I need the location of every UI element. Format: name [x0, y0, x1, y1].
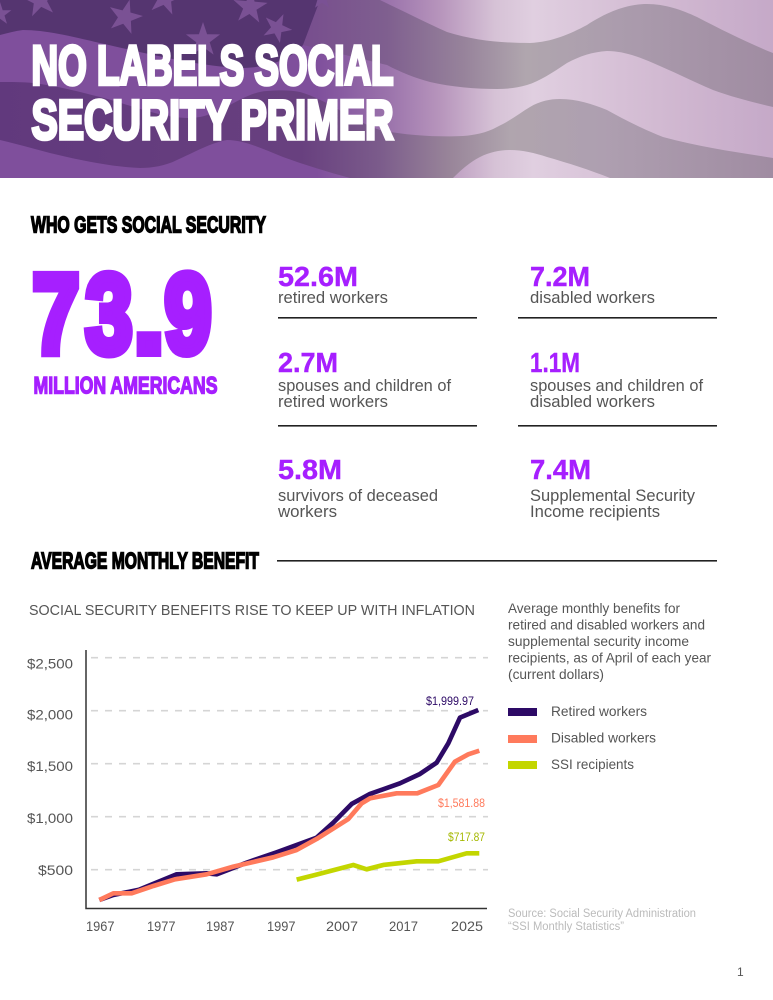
chart description: supplemental security income [508, 633, 689, 649]
x-axis labels: 2017 [389, 919, 418, 934]
panel: flag banner header [0, 0, 773, 178]
stat: spouses and children of retired workers: 2.7M [278, 347, 338, 378]
legend [508, 703, 656, 772]
big stat: 73.9 million Americans: . [134, 252, 164, 376]
value label: retired: $1,999.97 [426, 696, 474, 708]
value label: disabled: $1,581.88 [438, 798, 485, 810]
line: disabled workers [99, 751, 479, 900]
y-axis labels [27, 656, 73, 878]
x-axis labels [86, 919, 483, 934]
big stat: 73.9 million Americans: 3 [86, 252, 132, 376]
stat: survivors of deceased workers [277, 454, 438, 521]
y-axis labels: $2,000 [27, 706, 73, 722]
big stat: 73.9 million Americans: 9 [164, 252, 212, 376]
stat: spouses and children of disabled workers [518, 347, 717, 427]
flag stripe: upper dark band [303, 0, 773, 107]
x-axis labels: 1967 [86, 919, 114, 934]
stat: supplemental security income recipients: 7.4M [530, 454, 591, 485]
heading: who gets social security: WHO GETS SOCIAL SECURITY [31, 212, 266, 238]
y-axis labels: $1,000 [27, 810, 73, 826]
x-axis labels: 1997 [267, 919, 296, 934]
stat: disabled workers [518, 261, 717, 319]
title [32, 34, 394, 151]
title: NO LABELS SOCIAL [32, 34, 394, 96]
chart description [508, 600, 711, 682]
source note: Source: Social Security Administration [508, 908, 696, 920]
line chart: average monthly benefits [27, 650, 488, 934]
source note [508, 908, 696, 933]
stat: retired workers [278, 261, 477, 319]
y-axis labels: $2,500 [27, 656, 73, 672]
legend: Retired workers [551, 703, 647, 719]
source note: “SSI Monthly Statistics” [508, 921, 624, 933]
x-axis labels: 1977 [147, 919, 176, 934]
y-axis labels: $1,500 [27, 758, 73, 774]
big stat: 73.9 million Americans [32, 252, 218, 400]
stat: supplemental security income recipients: Supplemental Security [530, 486, 695, 505]
chart description: retired and disabled workers and [508, 616, 705, 632]
stat: survivors of deceased workers: survivors of deceased [278, 486, 438, 505]
chart description: Average monthly benefits for [508, 600, 680, 616]
x-axis labels: 2025 [451, 919, 483, 934]
stat: disabled workers: disabled workers [530, 288, 655, 307]
flag stripe: lower dark band [0, 82, 773, 178]
stat: survivors of deceased workers: workers [277, 502, 337, 521]
stat: spouses and children of retired workers: spouses and children of [278, 376, 451, 395]
chart title: SOCIAL SECURITY BENEFITS RISE TO KEEP UP WITH INFLATION [29, 603, 475, 619]
legend: Disabled workers [551, 730, 656, 746]
flag canton: dark field [0, 0, 320, 68]
stat: spouses and children of retired workers: retired workers [278, 392, 388, 411]
stat: spouses and children of disabled workers: 1.1M [530, 347, 580, 378]
stat: survivors of deceased workers: 5.8M [278, 454, 342, 485]
x-axis labels: 1987 [206, 919, 234, 934]
heading: average monthly benefit: AVERAGE MONTHLY BENEFIT [31, 548, 259, 574]
stat: supplemental security income recipients: Income recipients [530, 502, 660, 521]
stat: spouses and children of retired workers [278, 347, 477, 427]
stat: retired workers: retired workers [278, 288, 388, 307]
stat: spouses and children of disabled workers: spouses and children of [530, 376, 703, 395]
line: retired workers [99, 710, 478, 900]
chart axes [86, 650, 487, 908]
line: SSI recipients [297, 853, 479, 880]
page number: 1 [737, 965, 744, 979]
flag stars [0, 0, 333, 55]
big stat: 73.9 million Americans: 7 [32, 252, 80, 376]
stat: retired workers: 52.6M [278, 261, 358, 292]
chart description: recipients, as of April of each year [508, 650, 711, 666]
chart description: (current dollars) [508, 666, 604, 682]
value label: SSI: $717.87 [448, 832, 485, 844]
x-axis labels: 2007 [326, 919, 358, 934]
title: SECURITY PRIMER [32, 88, 394, 151]
stat: supplemental security income recipients [530, 454, 695, 521]
stat: disabled workers: 7.2M [530, 261, 590, 292]
stat: spouses and children of disabled workers: disabled workers [530, 392, 655, 411]
big stat: 73.9 million Americans: MILLION AMERICANS [34, 372, 218, 400]
legend: SSI recipients [551, 756, 634, 772]
y-axis labels: $500 [38, 862, 73, 878]
